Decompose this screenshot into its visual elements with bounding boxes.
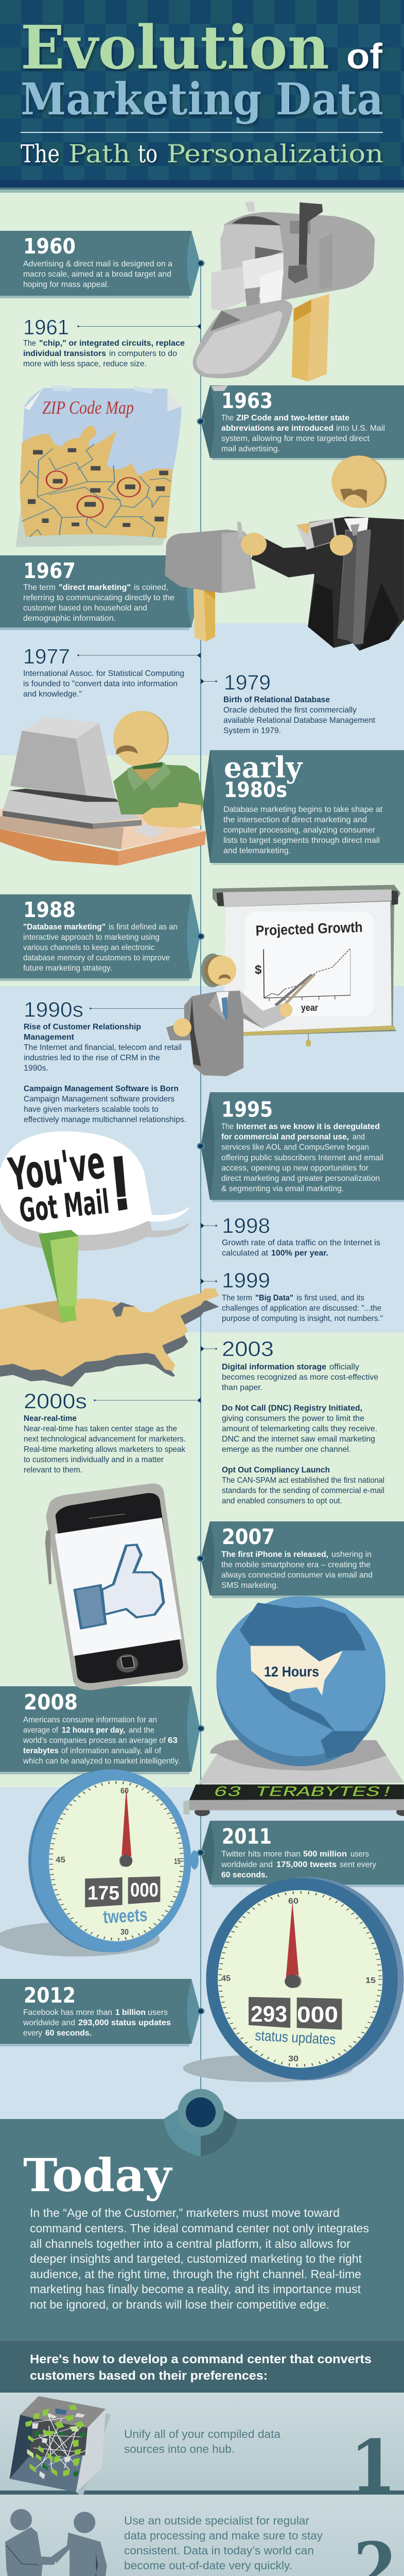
panel: 1960: hoping for mass appeal. — [23, 280, 109, 289]
panel: 1988: is first defined as an — [109, 923, 178, 931]
panel: 2011: Twitter hits more than — [221, 1850, 301, 1859]
panel: 2000s: Real-time marketing allows marketers to speak — [24, 1445, 186, 1454]
dial numbers — [221, 1897, 376, 2063]
panel: 2003: The CAN-SPAM act established the first national — [222, 1476, 384, 1485]
panel: 1960: Advertising & direct mail is designed on a — [23, 260, 172, 268]
panel: 1990s: have given marketers scalable tools to — [24, 1105, 159, 1114]
today paragraph: audience, at the right time, through the right channel. Real-time — [30, 2267, 361, 2281]
panel: 1995: offering public subscribers Internet and email — [221, 1154, 383, 1162]
globe label: 12 Hours — [264, 1664, 319, 1680]
today paragraph: not be ignored, or brands will lose their competitive edge. — [30, 2298, 329, 2311]
panel: 1963: mail advertising. — [221, 445, 280, 453]
subtitle — [21, 140, 383, 168]
panel: 1977: is founded to "convert data into information — [23, 680, 178, 688]
panel: 2012: 2012 — [24, 1983, 76, 2008]
map title: ZIP Code Map — [42, 397, 134, 418]
panel: 1960: 1960 — [23, 234, 76, 259]
step 2 text — [124, 2514, 323, 2572]
panel: 1960 — [0, 231, 205, 298]
panel: 2000s: Near-real-time — [24, 1414, 77, 1423]
panel: 1999 — [201, 1268, 383, 1323]
subtitle: to — [138, 140, 157, 168]
step 2 text: Use an outside specialist for regular — [124, 2514, 309, 2527]
panel: early 1980s: and telemarketing. — [223, 846, 291, 855]
panel: 2007: always connected consumer via email and — [221, 1571, 373, 1580]
panel: 1979 — [201, 671, 376, 735]
panel: 2003: 2003 — [222, 1337, 274, 1361]
panel: 2003: Opt Out Compliancy Launch — [222, 1466, 330, 1475]
timeline end marker — [164, 2089, 237, 2157]
header banner — [0, 0, 404, 193]
panel: 1990s: industries led to the rise of CRM in the — [24, 1054, 160, 1062]
subtitle: The — [21, 140, 60, 168]
panel: 1998: Growth rate of data traffic on the Internet is — [222, 1239, 380, 1247]
panel: 2008: 63 — [168, 1736, 178, 1745]
panel: 1963: The — [221, 414, 234, 422]
panel: 2000s: next technological advancement for marketers. — [24, 1435, 186, 1444]
panel: 1961: "chip," or integrated circuits, replace — [39, 339, 185, 348]
today paragraph: deeper insights and targeted, customized marketing to the right — [30, 2252, 362, 2265]
panel: 1977: 1977 — [23, 645, 70, 668]
panel: 2007: the mobile smartphone era – creating the — [221, 1561, 371, 1569]
panel: 1977 — [23, 645, 201, 699]
panel: 1988: "Database marketing" — [23, 923, 106, 931]
panel: 1990s: 1990s — [24, 997, 83, 1021]
dial numbers: 30 — [120, 1928, 129, 1937]
panel: 1995: The — [221, 1122, 234, 1131]
panel: command center heading: customers based on their preferences: — [30, 2369, 268, 2383]
panel: 2003: than paper. — [222, 1383, 262, 1392]
panel: early 1980s — [203, 750, 404, 865]
tweets counter: tweets — [102, 1904, 148, 1927]
panel: 2003: giving consumers the power to limit the — [222, 1414, 364, 1423]
panel: 2000s: relevant to them. — [24, 1466, 82, 1475]
panel: 1999: purpose of computing is insight, not numbers." — [222, 1314, 383, 1323]
number 1: 1 — [350, 2425, 396, 2507]
panel: 1979: available Relational Database Management — [223, 716, 376, 725]
panel: early 1980s: lists to target segments through direct mail — [223, 836, 380, 845]
panel: 1990s: effectively manage multichannel relationships. — [24, 1115, 186, 1124]
panel: today — [0, 2089, 404, 2341]
status counter: 000 — [297, 2002, 338, 2027]
panel: 1988: future marketing strategy. — [23, 964, 112, 973]
today paragraph: In the “Age of the Customer,” marketers must move toward — [30, 2206, 340, 2219]
illustration: You've Got Mail map: Got Mail — [17, 1183, 111, 1230]
panel: 1998: 100% per year. — [271, 1249, 328, 1258]
panel: 1960: macro scale, aimed at a broad target and — [23, 270, 171, 279]
illustration: projection screen — [166, 885, 400, 1076]
panel: 2003: amount of telemarketing calls they receive. — [222, 1425, 377, 1433]
today paragraph — [30, 2206, 369, 2311]
panel: 1990s — [24, 997, 190, 1124]
panel: 1961: more with less space, reduce size. — [23, 360, 147, 368]
illustration: man at computer — [0, 711, 206, 866]
panel: command center heading — [0, 2341, 404, 2393]
panel: early 1980s: the intersection of direct marketing and — [223, 816, 367, 824]
step 2 text: become out-of-date very quickly. — [124, 2559, 292, 2572]
panel: 1967: The term — [23, 583, 56, 592]
panel: command center heading: Here's how to develop a command center that converts — [30, 2352, 372, 2366]
panel: 1967: demographic information. — [23, 614, 116, 623]
panel: 2003: Do Not Call (DNC) Registry Initiated, — [222, 1404, 362, 1413]
panel: 2008: of information annually, all of — [61, 1747, 162, 1755]
panel: 2008: which can be analyzed to market intelligently. — [23, 1757, 180, 1766]
panel: 1963: system, allowing for more targeted direct — [221, 434, 370, 443]
panel: 2003: DNC and the internet saw email marketing — [222, 1435, 375, 1444]
panel: 2000s: Near-real-time has taken center stage as the — [24, 1425, 177, 1433]
illustration: globe on scale — [183, 1596, 404, 1816]
chart y label: $ — [255, 963, 262, 977]
status counter: 293 — [251, 2002, 287, 2027]
dial numbers: 60 — [120, 1787, 129, 1795]
title: of — [346, 36, 383, 76]
panel: 1998 — [201, 1214, 380, 1258]
illustration: You've Got Mail map — [0, 1131, 219, 1387]
icon: handshake — [5, 2509, 107, 2576]
panel: 1995 — [197, 1092, 404, 1202]
dial numbers: 45 — [56, 1856, 65, 1865]
panel: early 1980s: 1980s — [224, 777, 287, 802]
panel: 2008: average of — [23, 1726, 58, 1735]
panel: 1979: 1979 — [224, 671, 271, 694]
panel: step 1 — [0, 2393, 404, 2507]
panel: 1990s: Campaign Management Software is Born — [24, 1084, 179, 1093]
panel: 2012: 60 seconds. — [45, 2029, 92, 2038]
panel: 1990s: Campaign Management software providers — [24, 1095, 174, 1104]
panel: 2011: 60 seconds. — [221, 1871, 268, 1879]
panel: 2012: Facebook has more than — [23, 2008, 112, 2017]
panel: 1990s: Rise of Customer Relationship — [24, 1023, 141, 1031]
dial numbers — [56, 1787, 181, 1937]
panel: 1961 — [23, 315, 201, 368]
step 1 text — [124, 2428, 281, 2455]
panel: 1990s: The Internet and financial, telecom and retail — [24, 1043, 182, 1052]
timeline spine — [200, 263, 201, 2092]
status counter — [251, 2002, 338, 2047]
step 1 text: Unify all of your compiled data — [124, 2428, 281, 2441]
panel: 1988: 1988 — [23, 897, 76, 922]
panel: 1995: for commercial and personal use, — [221, 1132, 349, 1142]
illustration: mailbox — [193, 201, 375, 391]
panel: 1999: The term — [222, 1294, 252, 1302]
panel: 1995: & segmenting via email marketing. — [221, 1184, 344, 1193]
today paragraph: marketing has finally become a reality, and its importance must — [30, 2282, 361, 2296]
scale display: 63 TERABYTES! — [214, 1785, 394, 1801]
panel: 2003: emerge as the number one channel. — [222, 1445, 351, 1454]
panel: 1967: referring to communicating directly to the — [23, 594, 174, 602]
speech bubble text: You've — [5, 1136, 108, 1201]
panel: 1988: database memory of customers to improve — [23, 954, 170, 962]
illustration: ZIP code map — [15, 385, 182, 547]
panel: 2012: worldwide and — [23, 2019, 75, 2027]
panel: 1977: International Assoc. for Statistical Computing — [23, 669, 184, 678]
panel: 2008: world's companies process an average of — [23, 1736, 166, 1745]
step 1 text: sources into one hub. — [124, 2443, 235, 2455]
today paragraph: command centers. The ideal command center not only integrates — [30, 2222, 369, 2235]
panel: 1967: customer based on household and — [23, 604, 147, 613]
panel: 2007: The first iPhone is released, — [221, 1550, 328, 1559]
step 2 text: data processing and make sure to stay — [124, 2529, 323, 2542]
panel: 1967: "direct marketing" — [59, 583, 131, 592]
panel: early 1980s: computer processing, analyzing consumer — [223, 826, 376, 835]
panel: 2008 — [0, 1686, 205, 1774]
panel: 1988 — [0, 894, 205, 981]
today heading: Today — [23, 2148, 173, 2202]
panel: 2011: users — [350, 1850, 369, 1859]
panel: 2007 — [197, 1521, 404, 1598]
panel: 1999: is first used, and its — [296, 1294, 364, 1302]
panel: 1979: Oracle debuted the first commercially — [223, 706, 357, 715]
panel: 1995: 1995 — [221, 1097, 273, 1122]
panel: 1963: 1963 — [221, 388, 273, 413]
panel: 1995: access, opening up new opportunities for — [221, 1164, 369, 1173]
panel: 2008: 12 hours per day, — [62, 1726, 125, 1735]
panel: 2012: 1 billion — [115, 2008, 146, 2017]
panel: 2003: officially — [329, 1363, 359, 1371]
panel: 2007: 2007 — [222, 1524, 275, 1549]
panel: 2007: SMS marketing. — [221, 1581, 278, 1590]
panel: 2003 — [201, 1337, 384, 1505]
panel: 1967: 1967 — [23, 558, 76, 583]
title — [21, 13, 383, 125]
panel: 2000s — [24, 1389, 201, 1475]
panel: 1999: "Big Data" — [255, 1294, 293, 1302]
panel: 1990s: Management — [24, 1033, 75, 1042]
panel: 2008: and the — [129, 1726, 154, 1735]
tweets counter: 000 — [130, 1879, 159, 1901]
panel: 2003: and enabled consumers to opt out. — [222, 1497, 342, 1505]
panel: 2008: terabytes — [23, 1747, 59, 1755]
panel: 2012: 293,000 status updates — [78, 2019, 171, 2027]
panel: early 1980s: early — [224, 751, 303, 785]
dial numbers: 15 — [365, 1976, 376, 1985]
chart title: Projected Growth — [255, 919, 363, 939]
step 2 text: consistent. Data in today’s world can — [124, 2544, 314, 2557]
panel: 1979: Birth of Relational Database — [223, 696, 330, 704]
title: Marketing Data — [21, 74, 383, 125]
illustration: status updates stopwatch — [183, 1877, 403, 2082]
dial numbers: 45 — [221, 1974, 231, 1983]
panel: 1988: various channels to keep an electronic — [23, 943, 154, 952]
panel: 1967: is coined, — [134, 583, 168, 592]
panel: 1988: interactive approach to marketing using — [23, 933, 160, 942]
illustration: phone with thumbs up — [45, 1483, 188, 1690]
panel: 2003: becomes recognized as more cost-effective — [222, 1373, 378, 1382]
panel: 1977: and knowledge." — [23, 690, 82, 699]
panel: 2012 — [0, 1979, 205, 2046]
chart x label: year — [301, 1003, 318, 1013]
panel: 1995: services like AOL and CompuServe began — [221, 1143, 369, 1152]
panel: 2003: Digital information storage — [222, 1363, 326, 1371]
panel: 2012: users — [148, 2008, 168, 2017]
illustration: man checking mailbox — [165, 455, 404, 651]
panel: 1961: individual transistors — [23, 349, 106, 358]
panel: 1961: 1961 — [23, 315, 69, 339]
panel: 2011 — [197, 1821, 404, 1887]
subtitle: Path — [68, 140, 130, 168]
panel: 2011: 175,000 tweets — [276, 1860, 337, 1869]
panel: 2000s: to customers individually and in a matter — [24, 1455, 164, 1464]
panel: early 1980s: Database marketing begins to take shape at — [223, 805, 383, 814]
title: Evolution — [21, 13, 329, 83]
panel: 2011: 2011 — [222, 1824, 272, 1849]
subtitle: Personalization — [167, 140, 383, 168]
panel: 1998: calculated at — [222, 1249, 269, 1258]
panel: 1961: in computers to do — [109, 349, 177, 358]
panel: 2011: 500 million — [303, 1850, 347, 1859]
dial numbers: 30 — [288, 2055, 298, 2063]
tweets counter — [87, 1879, 159, 1927]
dial numbers: 60 — [288, 1897, 298, 1906]
today paragraph: all channels together into a central platform, it also allows for — [30, 2237, 350, 2250]
status counter: status updates — [255, 2027, 336, 2047]
panel: 1979: System in 1979. — [223, 726, 281, 735]
panel: 1995: Internet as we know it is deregulated — [236, 1122, 380, 1131]
illustration: tweets stopwatch — [0, 1769, 199, 1956]
panel: 2011: sent every — [340, 1860, 376, 1869]
panel: 1995: direct marketing and greater personalization — [221, 1174, 380, 1183]
panel: 1963: abbreviations are introduced — [221, 424, 333, 433]
panel: 1967 — [0, 555, 200, 630]
panel: 1963: ZIP Code and two-letter state — [236, 414, 349, 422]
icon: data cube — [10, 2396, 111, 2497]
panel: 1999: challenges of application are discussed: "...the — [222, 1304, 381, 1313]
panel: 2008: Americans consume information for an — [23, 1716, 157, 1724]
panel: 1999: 1999 — [222, 1268, 270, 1292]
panel: 1963: into U.S. Mail — [336, 424, 385, 433]
panel: 1990s: 1990s. — [24, 1064, 48, 1073]
panel: 1961: The — [23, 339, 36, 348]
panel: 1998: 1998 — [222, 1214, 270, 1238]
panel: step 2 — [0, 2495, 404, 2576]
panel: 2003: standards for the sending of commercial e-mail — [222, 1486, 384, 1495]
panel: 2000s: 2000s — [24, 1389, 87, 1413]
panel: 2007: ushering in — [331, 1550, 372, 1559]
panel: 1995: and — [353, 1132, 365, 1142]
panel: 2012: every — [23, 2029, 42, 2038]
panel: 1963 — [197, 385, 404, 460]
tweets counter: 175 — [87, 1883, 119, 1904]
panel: 2011: worldwide and — [221, 1860, 273, 1869]
dial numbers: 15 — [174, 1857, 181, 1866]
panel: 2008: 2008 — [24, 1690, 78, 1715]
